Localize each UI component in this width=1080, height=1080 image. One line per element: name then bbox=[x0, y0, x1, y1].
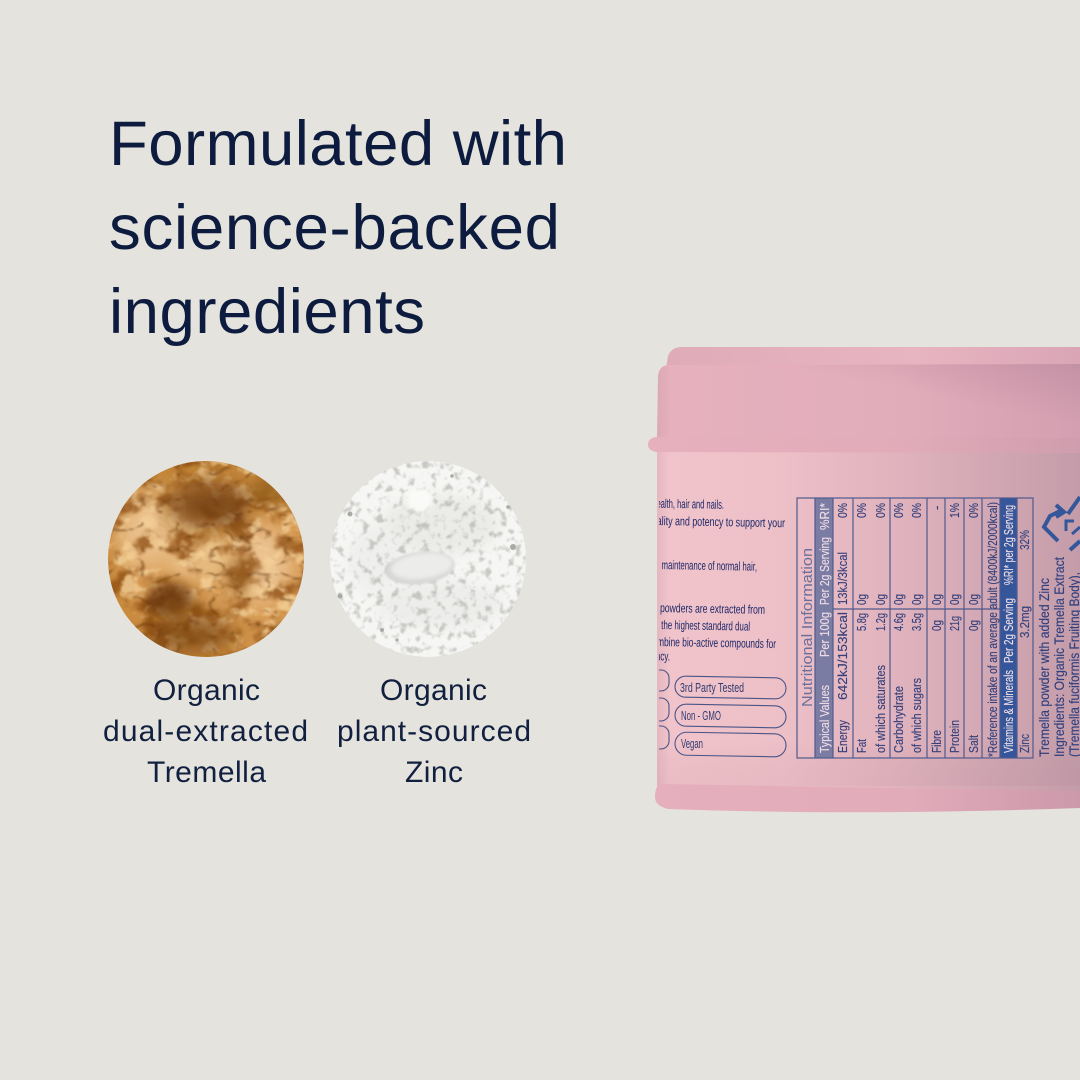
table text: Protein bbox=[947, 720, 962, 753]
table text: 1.2g bbox=[873, 613, 888, 631]
product description text: organically using the highest standard dual bbox=[600, 617, 750, 634]
table text: 5.8g bbox=[854, 613, 869, 631]
tin lid band bbox=[648, 437, 1080, 453]
table text: Salt bbox=[966, 735, 981, 753]
tin body bbox=[657, 450, 1080, 796]
table text: 0g bbox=[966, 594, 981, 605]
table text: 0% bbox=[854, 503, 869, 518]
product description text: extraction to combine bio-active compounds for bbox=[600, 634, 776, 651]
table text: Per 100g bbox=[817, 612, 832, 657]
ingredients text: Ingredients: Organic Tremella Extract bbox=[1051, 557, 1067, 757]
table text: 0g bbox=[947, 594, 962, 605]
ingredients text: Tremella powder with added Zinc bbox=[1036, 578, 1052, 757]
product description text: contributes to the maintenance of normal hair, bbox=[600, 557, 757, 574]
table text: *Reference intake of an average adult (8400kJ/2000kcal) bbox=[985, 502, 1000, 757]
nutrition table bbox=[797, 498, 1033, 758]
table text: of which saturates bbox=[873, 665, 888, 753]
product tin bbox=[600, 347, 1080, 812]
certification labels bbox=[680, 681, 744, 751]
label: zinc: Zinc bbox=[405, 756, 463, 789]
label: zinc: Organic bbox=[380, 674, 487, 707]
label: zinc: plant-sourced bbox=[337, 715, 531, 748]
table text: 3.5g bbox=[909, 613, 924, 631]
table text: 0% bbox=[966, 503, 981, 518]
product description text: potency. bbox=[640, 649, 670, 664]
table text: 1% bbox=[947, 503, 962, 518]
title bbox=[109, 109, 567, 347]
table text: Zinc bbox=[1017, 734, 1032, 753]
table text: Fibre bbox=[929, 730, 944, 753]
table text: - bbox=[929, 506, 944, 510]
table text: 0g bbox=[873, 594, 888, 605]
table text: 21g bbox=[947, 616, 962, 631]
title: Formulated with bbox=[109, 109, 567, 179]
table text: 3.2mg bbox=[1017, 606, 1032, 638]
table text: 0% bbox=[909, 503, 924, 518]
title: science-backed bbox=[109, 193, 560, 263]
label: zinc bbox=[337, 674, 531, 789]
table text: 0g bbox=[891, 594, 906, 605]
table grid bbox=[797, 498, 1033, 758]
ingredients text bbox=[1036, 557, 1080, 757]
table text: of which sugars bbox=[909, 678, 924, 753]
table text: 0% bbox=[873, 503, 888, 518]
label: tremella: dual-extracted bbox=[103, 715, 308, 748]
table text: Typical Values bbox=[817, 685, 832, 753]
table text bbox=[799, 502, 1032, 757]
icon: recycling symbol bbox=[1044, 497, 1080, 550]
table text: %RI* bbox=[817, 503, 832, 530]
product description text: your skin health, hair and nails. bbox=[620, 496, 724, 512]
tin base rim bbox=[655, 784, 1080, 812]
table text: 13kJ/3kcal bbox=[835, 552, 850, 605]
product description text: Our mushroom powders are extracted from bbox=[600, 600, 765, 617]
table text: Energy bbox=[835, 720, 850, 753]
table text: 32% bbox=[1017, 530, 1032, 550]
table text: 0g bbox=[909, 594, 924, 605]
table text: Vitamins & Minerals bbox=[1001, 670, 1016, 753]
title: ingredients bbox=[109, 277, 425, 347]
label: tremella: Tremella bbox=[147, 756, 266, 789]
table text: 4.6g bbox=[891, 613, 906, 631]
certification labels: Vegan bbox=[681, 737, 703, 751]
product description text bbox=[659, 498, 785, 663]
table text: 642kJ/153kcal bbox=[835, 612, 850, 700]
table text: 0g bbox=[854, 594, 869, 605]
table text: 0g bbox=[929, 594, 944, 605]
table text: Nutritional Information bbox=[799, 548, 816, 707]
tin lid shading bbox=[700, 364, 1080, 440]
table text: 0% bbox=[835, 503, 850, 518]
certification pills bbox=[659, 670, 787, 758]
tin body shading bbox=[657, 740, 1080, 786]
label: tremella: Organic bbox=[153, 674, 260, 707]
certification labels: Non - GMO bbox=[681, 709, 721, 723]
tin lid bbox=[657, 364, 1080, 440]
table text: 0g bbox=[966, 620, 981, 631]
certification labels: 3rd Party Tested bbox=[680, 681, 744, 695]
table text: 0g bbox=[929, 620, 944, 631]
table text: 0% bbox=[891, 503, 906, 518]
table text: Carbohydrate bbox=[891, 686, 906, 753]
table text: %RI* per 2g Serving bbox=[1001, 505, 1016, 585]
ingredient photo: tremella bbox=[108, 461, 304, 657]
label: tremella bbox=[103, 674, 308, 789]
table header fills bbox=[815, 498, 1017, 758]
table text: Fat bbox=[854, 739, 869, 753]
product description text: for the best quality and potency to support your bbox=[600, 513, 785, 530]
tin lid top rim bbox=[666, 347, 1080, 368]
ingredient photo: zinc powder bbox=[330, 461, 526, 657]
table text: Per 2g Serving bbox=[1001, 598, 1016, 663]
table text: Per 2g Serving bbox=[817, 537, 832, 605]
